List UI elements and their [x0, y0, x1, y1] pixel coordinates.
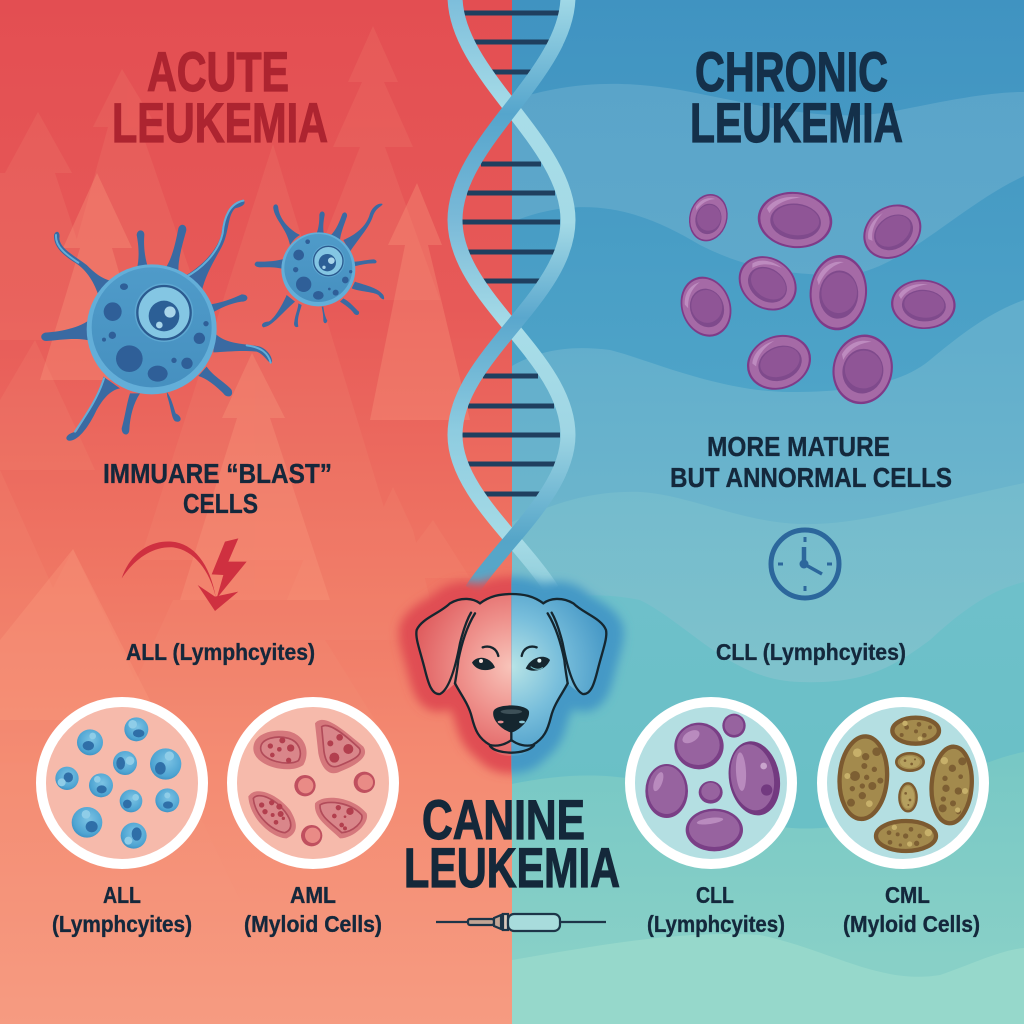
text: immature blast cells: CELLS — [183, 488, 258, 519]
title: canine leukemia — [404, 788, 620, 899]
CLL purple cells — [645, 714, 786, 851]
label: AML — [244, 882, 382, 937]
title: chronic leukemia: CHRONIC — [695, 40, 888, 103]
dog outline — [416, 594, 606, 753]
CML brown cells — [837, 718, 974, 851]
background: chronic blue half with waves — [512, 0, 1024, 1024]
dog nose — [493, 705, 529, 733]
label: CLL lymphocytes: CLL (Lymphcyites) — [716, 639, 906, 665]
panel: CLL microscope circle — [630, 702, 792, 864]
ALL blue cells — [55, 717, 181, 849]
red blood style cells: chronic — [672, 188, 957, 410]
label: ALL lymphocytes: ALL (Lymphcyites) — [126, 639, 315, 665]
label: CLL: (Lymphcyites) — [647, 911, 785, 937]
text: more mature but abnormal cells: MORE MATURE — [707, 431, 890, 462]
text: more mature but abnormal cells: BUT ANNORMAL CELLS — [670, 462, 952, 493]
dog glow — [416, 594, 606, 756]
label: AML: AML — [290, 882, 336, 908]
title: canine leukemia: LEUKEMIA — [404, 836, 620, 899]
text: immature blast cells — [103, 458, 332, 519]
text: more mature but abnormal cells — [670, 431, 952, 493]
dog head icon — [416, 594, 606, 756]
DNA strands — [455, 0, 568, 590]
icon: curved arrow and lightning bolt — [122, 538, 247, 611]
title: chronic leukemia — [690, 40, 903, 154]
labels under circles — [52, 882, 980, 937]
panel: ALL microscope circle — [41, 702, 203, 864]
label: ALL — [52, 882, 192, 937]
label: CML — [843, 882, 980, 937]
label: ALL: ALL — [103, 882, 141, 908]
title: chronic leukemia: LEUKEMIA — [690, 91, 903, 154]
background: acute red half — [0, 0, 512, 1024]
label: ALL: (Lymphcyites) — [52, 911, 192, 937]
label: CLL — [647, 882, 785, 937]
label: AML: (Myloid Cells) — [244, 911, 382, 937]
title: acute leukemia — [112, 40, 328, 154]
AML myeloid cells — [248, 720, 367, 838]
text: immature blast cells: IMMUARE “BLAST” — [103, 458, 332, 489]
icon: syringe — [436, 914, 606, 931]
title: acute leukemia: ACUTE — [147, 40, 289, 103]
DNA rungs — [462, 10, 560, 496]
label: CML: CML — [885, 882, 930, 908]
title: acute leukemia: LEUKEMIA — [112, 91, 328, 154]
icon: small blast cell — [255, 204, 384, 327]
title: canine leukemia: CANINE — [422, 788, 585, 851]
panel: CML microscope circle — [822, 702, 984, 864]
panel: AML microscope circle — [232, 702, 394, 864]
icon: large blast cell — [41, 200, 272, 441]
label: CLL: CLL — [696, 882, 734, 908]
dog eyes — [472, 657, 550, 671]
icon: clock — [771, 530, 839, 598]
label: CML: (Myloid Cells) — [843, 911, 980, 937]
DNA double helix — [455, 0, 568, 590]
